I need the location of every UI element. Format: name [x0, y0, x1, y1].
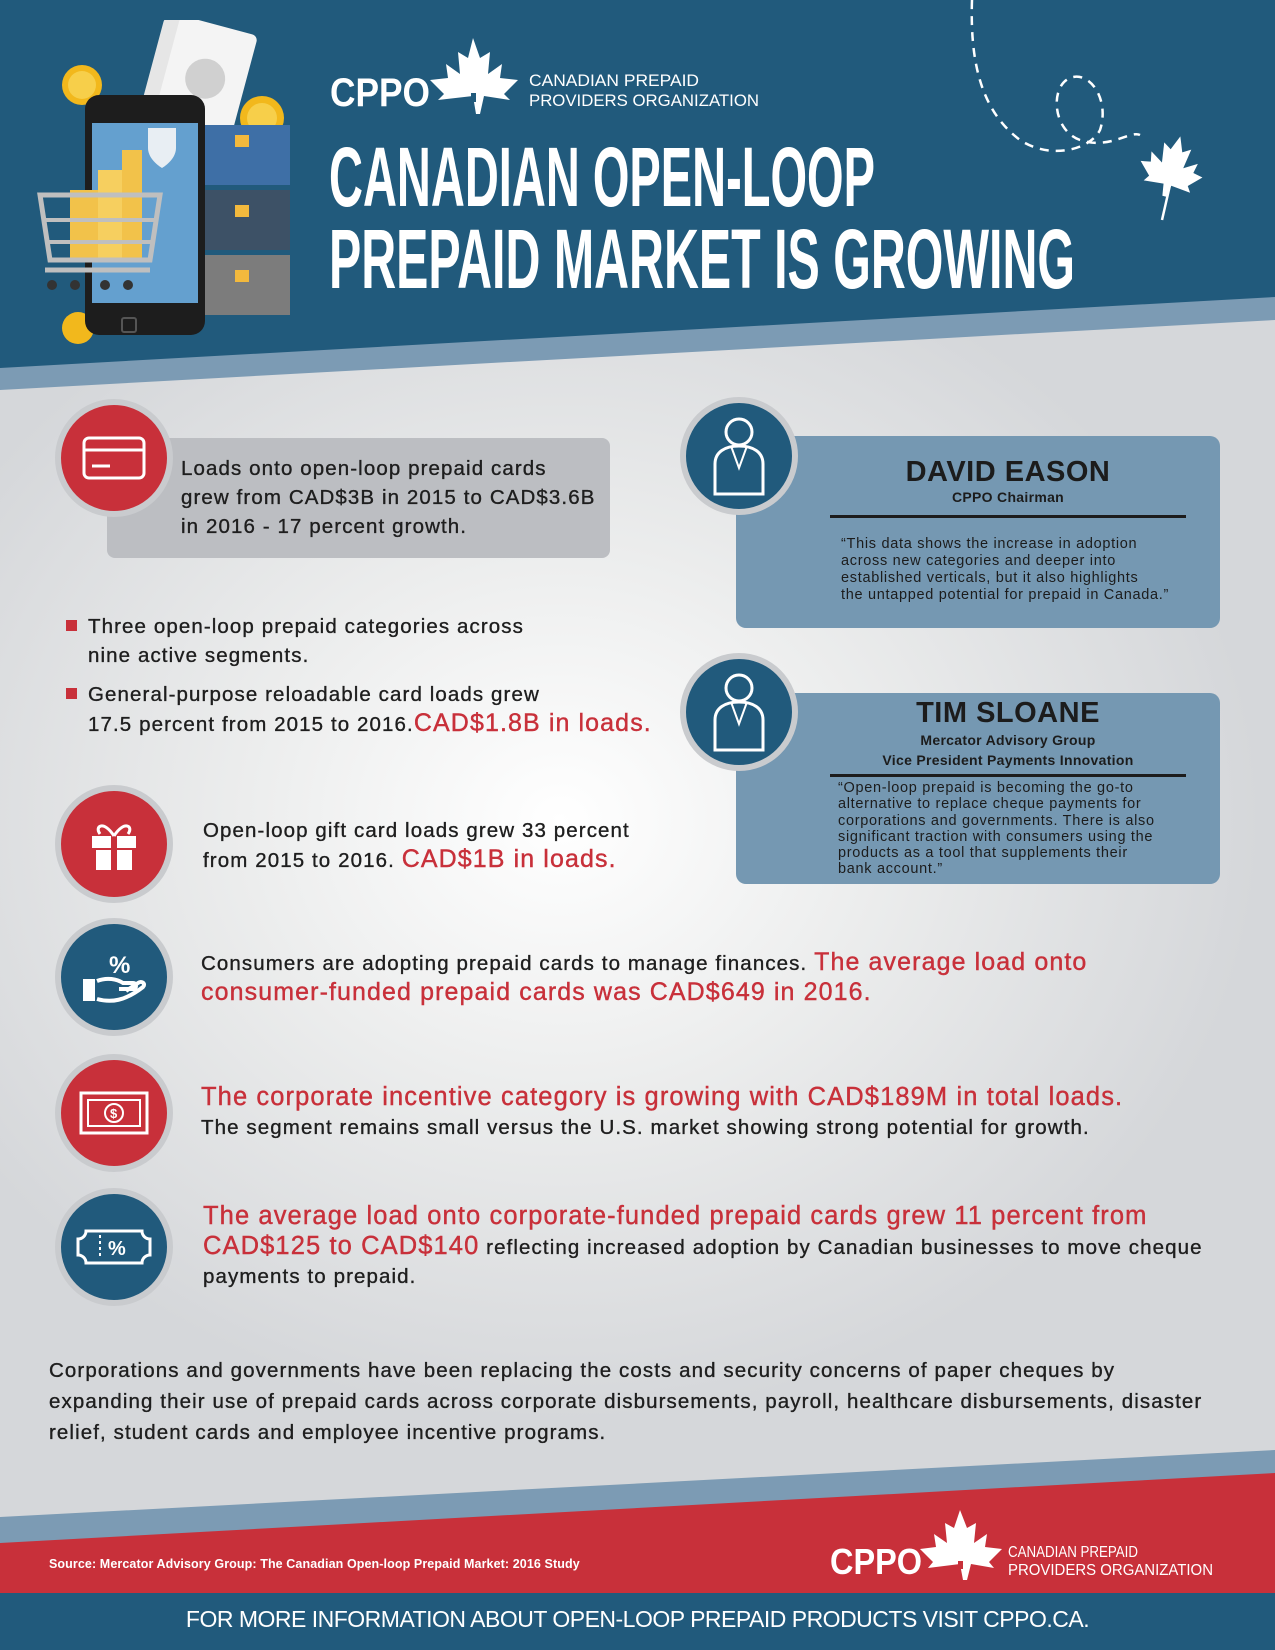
- panel: Tim Sloane quote: products as a tool that supplements their: [838, 845, 1128, 861]
- footer logo: CANADIAN PREPAID: [1008, 1544, 1138, 1561]
- text: consumer average load: consumer-funded prepaid cards was CAD$649 in 2016.: [201, 978, 872, 1006]
- text: corporate incentive: The corporate incentive category is growing with CAD$189M in total loads.: [201, 1083, 1123, 1111]
- panel: loads stat box: [107, 438, 610, 558]
- icon: banknote: [55, 1054, 173, 1172]
- panel: Tim Sloane quote: Vice President Payments Innovation: [882, 752, 1134, 768]
- header logo: CPPO: [330, 71, 430, 115]
- panel: Tim Sloane quote: [736, 693, 1220, 884]
- icon: hand with percent: %: [109, 952, 130, 979]
- bullets: categories: General-purpose reloadable card loads grew: [88, 683, 540, 706]
- text: closing paragraph: [49, 1359, 1202, 1444]
- panel: Tim Sloane quote: alternative to replace cheque payments for: [838, 796, 1141, 812]
- panel: David Eason quote: CPPO Chairman: [952, 489, 1064, 505]
- panel: Tim Sloane quote: bank account.”: [838, 861, 943, 877]
- header logo: CANADIAN PREPAID: [529, 71, 699, 90]
- panel: David Eason quote: DAVID EASON: [906, 456, 1110, 488]
- footer logo: CPPO: [830, 1541, 922, 1582]
- icon: hand with percent: [55, 918, 173, 1036]
- text: gift card loads: Open-loop gift card loads grew 33 percent: [203, 819, 630, 842]
- bullets: categories: Three open-loop prepaid categories across: [88, 615, 524, 638]
- header background: [0, 0, 1275, 390]
- bullets: categories: [66, 615, 652, 737]
- text: consumer average load: [201, 948, 1087, 1006]
- panel: David Eason quote: “This data shows the increase in adoption: [841, 536, 1137, 552]
- text: loads growth: [181, 457, 595, 538]
- bullets: categories: nine active segments.: [88, 644, 309, 667]
- panel: Tim Sloane quote: TIM SLOANE: [916, 697, 1100, 729]
- text: loads growth: grew from CAD$3B in 2015 to CAD$3.6B: [181, 486, 595, 509]
- icon: banknote: $: [110, 1106, 118, 1121]
- text: gift card loads: [203, 819, 630, 873]
- text: consumer average load: Consumers are adopting prepaid cards to manage finances. The average load onto: [201, 948, 1087, 976]
- text: corporate-funded average load: payments to prepaid.: [203, 1265, 416, 1288]
- icon: gift: [55, 785, 173, 903]
- icon: person David: [680, 397, 798, 515]
- footer call to action: FOR MORE INFORMATION ABOUT OPEN-LOOP PREPAID PRODUCTS VISIT CPPO.CA.: [186, 1606, 1089, 1632]
- text: corporate incentive: The segment remains small versus the U.S. market showing strong potential for growth.: [201, 1116, 1090, 1139]
- icon: credit card: [55, 399, 173, 517]
- text: loads growth: Loads onto open-loop prepaid cards: [181, 457, 547, 480]
- icon: ticket with percent: %: [108, 1238, 126, 1260]
- icon: ticket with percent: [55, 1188, 173, 1306]
- panel: David Eason quote: across new categories and deeper into: [841, 553, 1116, 569]
- text: closing paragraph: expanding their use of prepaid cards across corporate disbursements, payroll, healthcare disbursements, disaster: [49, 1390, 1202, 1413]
- footer logo: [830, 1510, 1213, 1582]
- text: gift card loads: from 2015 to 2016. CAD$1B in loads.: [203, 845, 617, 873]
- decorative dashed flight path with maple leaf: [970, 0, 1202, 220]
- text: corporate-funded average load: The average load onto corporate-funded prepaid cards grew 11 percent from: [203, 1202, 1148, 1230]
- source note: Source: Mercator Advisory Group: The Canadian Open-loop Prepaid Market: 2016 Study: [49, 1557, 580, 1571]
- panel: Tim Sloane quote: Mercator Advisory Group: [920, 732, 1096, 748]
- panel: Tim Sloane quote: corporations and governments. There is also: [838, 813, 1155, 829]
- header illustration: phone with cart, coins and cards: [37, 20, 290, 344]
- text: corporate-funded average load: [203, 1202, 1203, 1288]
- panel: Tim Sloane quote: significant traction with consumers using the: [838, 829, 1153, 845]
- text: corporate incentive: [201, 1083, 1123, 1139]
- footer background: [0, 1450, 1275, 1650]
- text: corporate-funded average load: CAD$125 to CAD$140 reflecting increased adoption by Canadian businesses to move cheque: [203, 1232, 1203, 1260]
- text: closing paragraph: relief, student cards and employee incentive programs.: [49, 1421, 606, 1444]
- text: loads growth: in 2016 - 17 percent growth.: [181, 515, 467, 538]
- title: [329, 140, 1075, 300]
- panel: David Eason quote: [736, 436, 1220, 628]
- panel: Tim Sloane quote: “Open-loop prepaid is becoming the go-to: [838, 780, 1134, 796]
- panel: David Eason quote: established verticals, but it also highlights: [841, 570, 1138, 586]
- text: closing paragraph: Corporations and governments have been replacing the costs and security concerns of paper cheques by: [49, 1359, 1115, 1382]
- icon: person Tim: [680, 653, 798, 771]
- bullets: categories: 17.5 percent from 2015 to 2016.CAD$1.8B in loads.: [88, 709, 652, 737]
- header logo: [330, 38, 759, 115]
- panel: David Eason quote: the untapped potential for prepaid in Canada.”: [841, 587, 1169, 603]
- footer logo: PROVIDERS ORGANIZATION: [1008, 1562, 1213, 1579]
- header logo: PROVIDERS ORGANIZATION: [529, 91, 759, 110]
